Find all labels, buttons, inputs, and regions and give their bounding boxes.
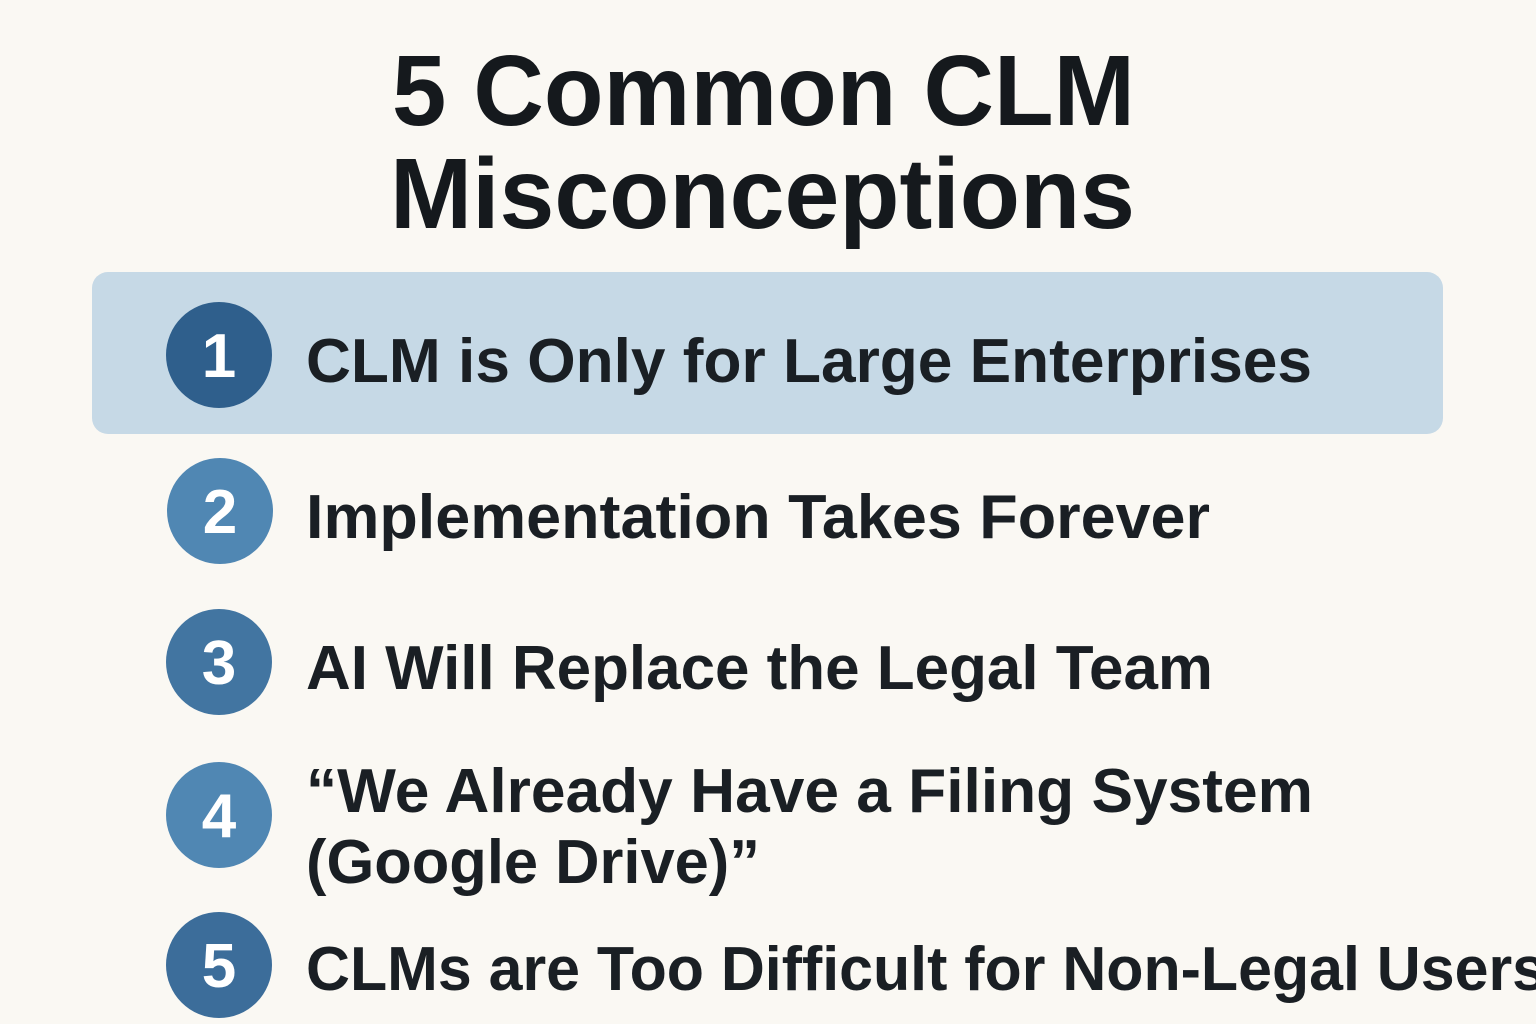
item 3: AI Will Replace the Legal Team xyxy=(306,634,1213,703)
item 1: 1 xyxy=(202,322,236,391)
highlight panel: item 1 xyxy=(92,272,1443,434)
title: Misconceptions xyxy=(390,138,1135,250)
item 2: Implementation Takes Forever xyxy=(306,483,1210,552)
item 1 xyxy=(166,302,1312,408)
item 1: CLM is Only for Large Enterprises xyxy=(306,327,1312,396)
item 5: CLMs are Too Difficult for Non-Legal Users xyxy=(306,935,1536,1004)
item 5: 5 xyxy=(202,932,236,1001)
title: 5 Common CLM xyxy=(392,35,1135,147)
item 4 xyxy=(166,757,1313,897)
item 3 xyxy=(166,609,1213,715)
item 4: 4 xyxy=(202,782,237,851)
item 5 xyxy=(166,912,1536,1018)
item 2 xyxy=(167,458,1210,564)
item 3: 3 xyxy=(202,629,236,698)
title xyxy=(390,35,1135,250)
item 2: 2 xyxy=(203,478,237,547)
item 4: (Google Drive)” xyxy=(306,828,760,897)
item 4: “We Already Have a Filing System xyxy=(306,757,1313,826)
